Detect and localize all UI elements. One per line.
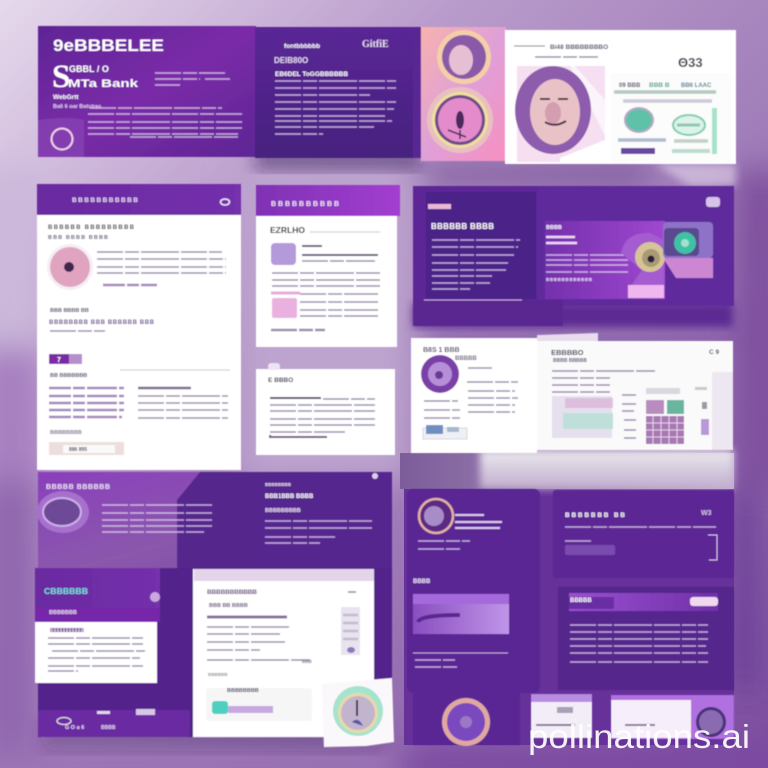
text block: right page copy: GitfiE [362, 39, 389, 50]
tag [428, 204, 451, 209]
panel: pink portrait card [413, 27, 506, 161]
tag [423, 425, 467, 439]
panel: tall white card [37, 184, 241, 470]
icon: upper portrait ring [437, 30, 491, 84]
panel: white data sheet [537, 333, 733, 450]
text block [432, 240, 520, 289]
panel: lower-right left column [407, 489, 540, 693]
text block [302, 246, 378, 255]
panel: tall white card: BB BBBBBBB [50, 373, 87, 379]
panel: tall white card: BBBBBBBB [50, 430, 82, 436]
panel: bottom white tile [611, 695, 734, 739]
icon: ring [38, 118, 84, 157]
panel: teal title card: BBBBBBB [49, 610, 77, 616]
icon: ring sticker [322, 678, 394, 747]
text block: intro copy [97, 252, 226, 273]
icon: purple ring [421, 355, 459, 393]
panel: white data sheet: BBBB BBBBB [553, 358, 587, 364]
heading: brochure title: 9eBBBELEE [53, 36, 164, 55]
chart: pale blocks [552, 396, 613, 438]
panel: upper dark info card [553, 490, 734, 578]
panel: pricing cards: BBB B [649, 82, 670, 89]
feature banner: BBBBBBBBBBBB [546, 277, 593, 282]
panel: large white sheet: BBBBBB [208, 672, 228, 677]
panel: lower-left purple block [37, 472, 392, 750]
thumbnail [271, 243, 296, 265]
footer tag [49, 442, 124, 455]
thumbnail [272, 298, 297, 318]
panel: white portrait spread [505, 30, 736, 164]
watermark: pollinations.ai [528, 718, 750, 755]
panel: upper dark info card: BBBBBBB BB [565, 512, 625, 519]
text block: right page copy: DEIB80O [274, 56, 308, 65]
icon: green pill right [673, 115, 705, 135]
panel: upper dark info card: W3 [701, 510, 712, 517]
panel: top-left purple brochure: WebGrtt [53, 94, 79, 101]
header: purple band [37, 184, 241, 215]
panel: white product card: B8S 1 BBB [423, 347, 460, 354]
panel: small white card [256, 363, 395, 455]
text block: two columns [49, 388, 228, 418]
panel: lower-left purple block: BBBBBBBBB [265, 508, 301, 514]
panel: tall white card: BBB BBBB BB [50, 308, 89, 314]
panel: bottom-left icon bar: BBBB [101, 725, 116, 731]
panel: white data sheet: EBBBBO [551, 348, 584, 357]
panel: white product card: BBBBB [455, 356, 477, 362]
panel: large white sheet: BBB BB BBBB [209, 603, 248, 609]
coupon [206, 688, 312, 721]
panel: large white sheet: BBB [302, 659, 312, 664]
panel: bottom-left icon bar: G O a 6 [65, 725, 84, 731]
text: spread heading: Bi48 BBBBBBBBO [550, 44, 608, 51]
feature banner: BBBB [546, 225, 562, 231]
legend column [695, 372, 733, 450]
device illustration [621, 222, 713, 298]
icon: lower portrait ring [427, 87, 493, 153]
panel: bottom-left icon bar [38, 709, 190, 737]
panel: small white card with header: BBBBBBBBBB [271, 201, 339, 208]
button: 7 [57, 357, 61, 364]
image: large portrait [515, 66, 605, 162]
panel: pricing cards: BB6 LAAC [681, 83, 712, 89]
panel: pricing cards [611, 74, 731, 162]
icon: badge [706, 197, 720, 207]
panel: lower-left purple block: BBB1BBB BBBB [265, 494, 314, 500]
icon: bottom ring tile [413, 693, 520, 746]
footer tag: 886 895 [69, 447, 87, 453]
coupon: BBBBBBBB [227, 688, 259, 694]
panel: top-left purple brochure [38, 26, 420, 170]
panel: small white card: E BBBO [268, 377, 293, 384]
panel: pricing cards: 09 BBB [619, 83, 641, 89]
panel: white data sheet: C 9 [709, 349, 720, 356]
panel: tall white card: BBBBBB BBBBBBBBB [48, 225, 135, 231]
dish icon [419, 499, 453, 533]
heading: BBBBB BBBBBB [46, 484, 110, 491]
text block [424, 368, 518, 418]
panel: lower dark info card: BBBBB [570, 598, 592, 604]
subheading: large serif title: S [52, 59, 70, 95]
table: small column [622, 395, 636, 438]
panel: top-left purple brochure: Ba6 6 oar Batstras [53, 104, 101, 110]
text block: right page copy: EB6DEL ToGGBBBBBB [275, 71, 348, 78]
panel: tall white card: BBB BBBB BBBB [48, 235, 108, 241]
text block: right page copy [274, 39, 396, 134]
panel: lower dark info card [558, 587, 734, 690]
panel: large white sheet: BBBBBBBBBBB [207, 589, 257, 596]
banner [413, 594, 509, 634]
panel: top-left purple brochure: MTa Bank [68, 78, 139, 90]
text block: left body lines [88, 73, 242, 137]
panel: small white card with header: EZRLHO [270, 225, 305, 235]
panel: large white sheet [193, 569, 374, 737]
feature banner [545, 221, 665, 299]
button [49, 354, 82, 364]
text block: right page copy: fontbbbbbb [284, 43, 320, 50]
panel: purple spread with device [413, 186, 734, 327]
icon: green pill left [625, 108, 653, 132]
note tab [268, 363, 280, 370]
panel: white product card [411, 338, 537, 453]
heading: BBBBBB BBBB [431, 222, 494, 231]
panel: teal title card: CBBBBBB [44, 586, 88, 596]
icon: pink ring [47, 244, 93, 290]
icon: chip [372, 473, 378, 479]
panel: lower-left purple block: BBBBBBBB [265, 482, 292, 487]
icon: logo mark: Θ33 [678, 55, 703, 70]
panel: small white card with header [256, 185, 400, 347]
panel: tall white card: BBBBBBBB BBB BBBBBB BBB [49, 320, 155, 326]
icon: textured dish [37, 491, 89, 533]
lower-right backing [404, 489, 734, 745]
header: purple band: BBBBBBBBBBB [72, 197, 138, 204]
panel: top-left purple brochure: GBBL / O [69, 64, 109, 74]
panel: teal title card [35, 568, 160, 683]
panel: teal title card: BBBBBBBBBBB [50, 628, 84, 634]
panel: lower-right left column: BBBB [413, 579, 431, 585]
chart: heat grid [646, 388, 684, 444]
panel: bottom lilac tile [531, 694, 592, 738]
